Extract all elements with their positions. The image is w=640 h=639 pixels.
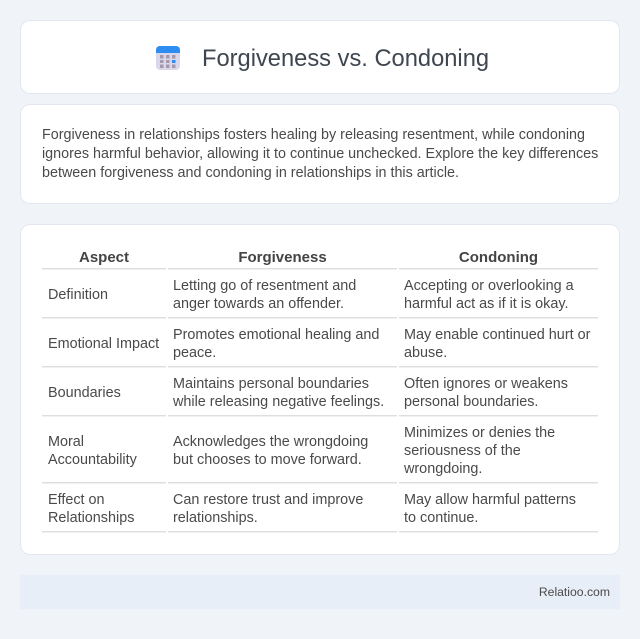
- emotional impact: condoning: [404, 327, 590, 361]
- row label: moral accountability: Moral: [48, 434, 84, 450]
- moral accountability: condoning: seriousness of the: [404, 443, 521, 459]
- moral accountability: forgiveness: Acknowledges the wrongdoing: [173, 434, 368, 450]
- emotional impact: forgiveness: peace.: [173, 345, 216, 361]
- row label: emotional impact: Emotional Impact: [48, 336, 159, 352]
- table card: [20, 224, 620, 555]
- boundaries: forgiveness: [173, 376, 384, 410]
- definition: condoning: Accepting or overlooking a: [404, 278, 574, 294]
- row label: moral accountability: Accountability: [48, 452, 137, 468]
- boundaries: forgiveness: while releasing negative feelings.: [173, 394, 384, 410]
- moral accountability: condoning: wrongdoing.: [404, 461, 482, 477]
- effect on relationships: forgiveness: Can restore trust and improve: [173, 492, 363, 508]
- emotional impact: condoning: May enable continued hurt or: [404, 327, 590, 343]
- definition: condoning: harmful act as if it is okay.: [404, 296, 568, 312]
- intro card: [20, 104, 620, 204]
- emotional impact: forgiveness: [173, 327, 379, 361]
- effect on relationships: forgiveness: relationships.: [173, 510, 258, 526]
- intro text: Forgiveness in relationships fosters healing by releasing resentment, while condoning: [42, 127, 585, 143]
- table header: aspect: Aspect: [79, 249, 129, 266]
- moral accountability: condoning: Minimizes or denies the: [404, 425, 555, 441]
- header card: [20, 20, 620, 94]
- definition: forgiveness: [173, 278, 356, 312]
- definition: forgiveness: Letting go of resentment and: [173, 278, 356, 294]
- moral accountability: forgiveness: but chooses to move forward.: [173, 452, 362, 468]
- footer bar: [20, 575, 620, 609]
- row label: moral accountability: [48, 434, 137, 468]
- emotional impact: forgiveness: Promotes emotional healing and: [173, 327, 379, 343]
- footer text: Relatioo.com: [539, 585, 610, 599]
- table header: forgiveness: Forgiveness: [238, 249, 327, 266]
- emotional impact: condoning: abuse.: [404, 345, 447, 361]
- boundaries: condoning: Often ignores or weakens: [404, 376, 568, 392]
- boundaries: condoning: personal boundaries.: [404, 394, 538, 410]
- definition: forgiveness: anger towards an offender.: [173, 296, 344, 312]
- intro text: [42, 127, 598, 181]
- boundaries: condoning: [404, 376, 568, 410]
- effect on relationships: forgiveness: [173, 492, 363, 526]
- icon: calendar: [156, 46, 180, 70]
- title: Forgiveness vs. Condoning: [202, 46, 489, 72]
- effect on relationships: condoning: May allow harmful patterns: [404, 492, 576, 508]
- intro text: ignores harmful behavior, allowing it to continue unchecked. Explore the key differences: [42, 146, 598, 162]
- row label: effect on relationships: [48, 492, 134, 526]
- moral accountability: forgiveness: [173, 434, 368, 468]
- row label: boundaries: Boundaries: [48, 385, 121, 401]
- row label: effect on relationships: Relationships: [48, 510, 134, 526]
- row label: effect on relationships: Effect on: [48, 492, 105, 508]
- boundaries: forgiveness: Maintains personal boundaries: [173, 376, 369, 392]
- definition: condoning: [404, 278, 574, 312]
- table header: condoning: Condoning: [459, 249, 538, 266]
- moral accountability: condoning: [404, 425, 555, 477]
- effect on relationships: condoning: to continue.: [404, 510, 478, 526]
- row label: definition: Definition: [48, 287, 108, 303]
- intro text: between forgiveness and condoning in relationships in this article.: [42, 165, 459, 181]
- effect on relationships: condoning: [404, 492, 576, 526]
